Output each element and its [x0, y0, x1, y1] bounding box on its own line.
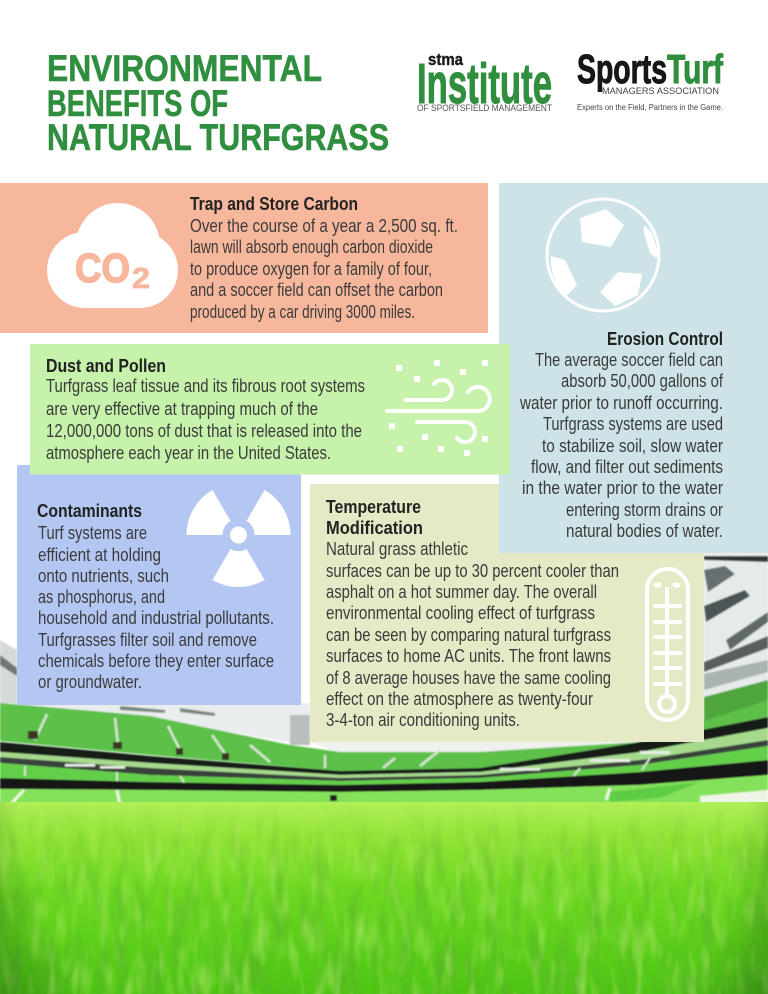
icon: CO2 cloud	[47, 203, 178, 308]
temperature text: of 8 average houses have the same cooling	[326, 668, 611, 688]
temperature text: Temperature	[326, 497, 421, 517]
carbon text: lawn will absorb enough carbon dioxide	[190, 237, 433, 257]
erosion control text: absorb 50,000 gallons of	[561, 371, 724, 391]
erosion control text: water prior to runoff occurring.	[519, 393, 723, 413]
logo: Sports Turf Managers Association: Turf	[667, 46, 723, 92]
temperature text: Modification	[326, 518, 423, 538]
contaminants text: onto nutrients, such	[38, 566, 169, 586]
temperature text: surfaces can be up to 30 percent cooler than	[326, 561, 619, 581]
panel: temperature modification	[310, 484, 768, 742]
title: BENEFITS OF	[47, 83, 228, 124]
erosion control text	[519, 329, 724, 541]
carbon text	[190, 194, 458, 322]
contaminants text: as phosphorus, and	[38, 587, 165, 607]
contaminants text: Contaminants	[37, 501, 142, 521]
carbon text: Trap and Store Carbon	[190, 194, 358, 214]
stadium photo	[0, 553, 768, 994]
logo: Sports Turf Managers Association: Sports	[577, 46, 667, 92]
logo: Sports Turf Managers Association: Experts on the Field, Partners in the Game.	[577, 103, 723, 112]
logo: STMA Institute: Institute	[417, 52, 552, 116]
carbon text: to produce oxygen for a family of four,	[190, 259, 432, 279]
dust text	[46, 356, 365, 463]
logo: STMA Institute: stma	[428, 50, 463, 69]
erosion control text: natural bodies of water.	[566, 521, 723, 541]
erosion control text: Turfgrass systems are used	[543, 414, 723, 434]
dust text: are very effective at trapping much of the	[46, 399, 318, 419]
carbon text: Over the course of a year a 2,500 sq. ft.	[190, 216, 458, 236]
erosion control text: flow, and filter out sediments	[531, 457, 723, 477]
contaminants text: Turfgrasses filter soil and remove	[38, 630, 257, 650]
title: ENVIRONMENTAL	[47, 48, 322, 89]
dust text: Dust and Pollen	[46, 356, 166, 376]
erosion control text: to stabilize soil, slow water	[542, 436, 723, 456]
contaminants text: household and industrial pollutants.	[38, 608, 274, 628]
erosion control text: entering storm drains or	[566, 500, 723, 520]
contaminants text: Turf systems are	[38, 523, 147, 543]
panel: erosion control	[499, 183, 768, 553]
panel: dust and pollen	[30, 344, 510, 474]
carbon text: produced by a car driving 3000 miles.	[190, 302, 415, 322]
left side roof	[0, 640, 17, 703]
icon: thermometer	[647, 569, 688, 720]
panel: contaminants	[17, 465, 301, 705]
erosion control text: Erosion Control	[607, 329, 723, 349]
black band upper	[0, 717, 768, 775]
temperature text	[326, 497, 619, 730]
mid dark band	[0, 740, 768, 781]
dust text: Turfgrass leaf tissue and its fibrous root systems	[46, 376, 365, 396]
temperature text: effect on the atmosphere as twenty-four	[326, 689, 593, 709]
title	[47, 48, 389, 158]
dust text: 12,000,000 tons of dust that is released into the	[46, 421, 362, 441]
logo: Sports Turf Managers Association	[577, 46, 723, 112]
right side roof	[704, 553, 768, 722]
upper seating tier	[0, 700, 768, 771]
contaminants text: chemicals before they enter surface	[38, 651, 274, 671]
icon: CO2 cloud: 2	[132, 263, 150, 295]
panel: trap and store carbon	[0, 183, 488, 333]
temperature text: 3-4-ton air conditioning units.	[326, 710, 520, 730]
icon: wind and particles	[387, 360, 490, 456]
middle seating tier	[0, 746, 768, 785]
light strip	[0, 728, 768, 778]
erosion control text: in the water prior to the water	[522, 478, 723, 498]
carbon text: and a soccer field can offset the carbon	[190, 280, 443, 300]
turf	[0, 802, 768, 994]
icon: soccer ball	[547, 199, 659, 311]
contaminants text	[37, 501, 274, 692]
temperature text: surfaces to home AC units. The front lawns	[326, 646, 611, 666]
contaminants text: or groundwater.	[38, 672, 142, 692]
icon: radiation	[186, 490, 290, 587]
icon: CO2 cloud: CO	[75, 245, 130, 291]
temperature text: Natural grass athletic	[326, 539, 468, 559]
logo: STMA Institute	[417, 50, 552, 116]
contaminants text: efficient at holding	[38, 545, 161, 565]
dust text: atmosphere each year in the United States.	[46, 443, 331, 463]
temperature text: asphalt on a hot summer day. The overall	[326, 582, 597, 602]
black band lower	[0, 760, 768, 792]
logo: STMA Institute: OF SPORTSFIELD MANAGEMENT	[417, 103, 552, 113]
erosion control text: The average soccer field can	[535, 350, 723, 370]
temperature text: environmental cooling effect of turfgrass	[326, 603, 595, 623]
title: NATURAL TURFGRASS	[47, 117, 389, 158]
lower seating tier	[0, 775, 768, 806]
temperature text: can be seen by comparing natural turfgrass	[326, 625, 611, 645]
logo: Sports Turf Managers Association: MANAGERS ASSOCIATION	[602, 86, 719, 97]
